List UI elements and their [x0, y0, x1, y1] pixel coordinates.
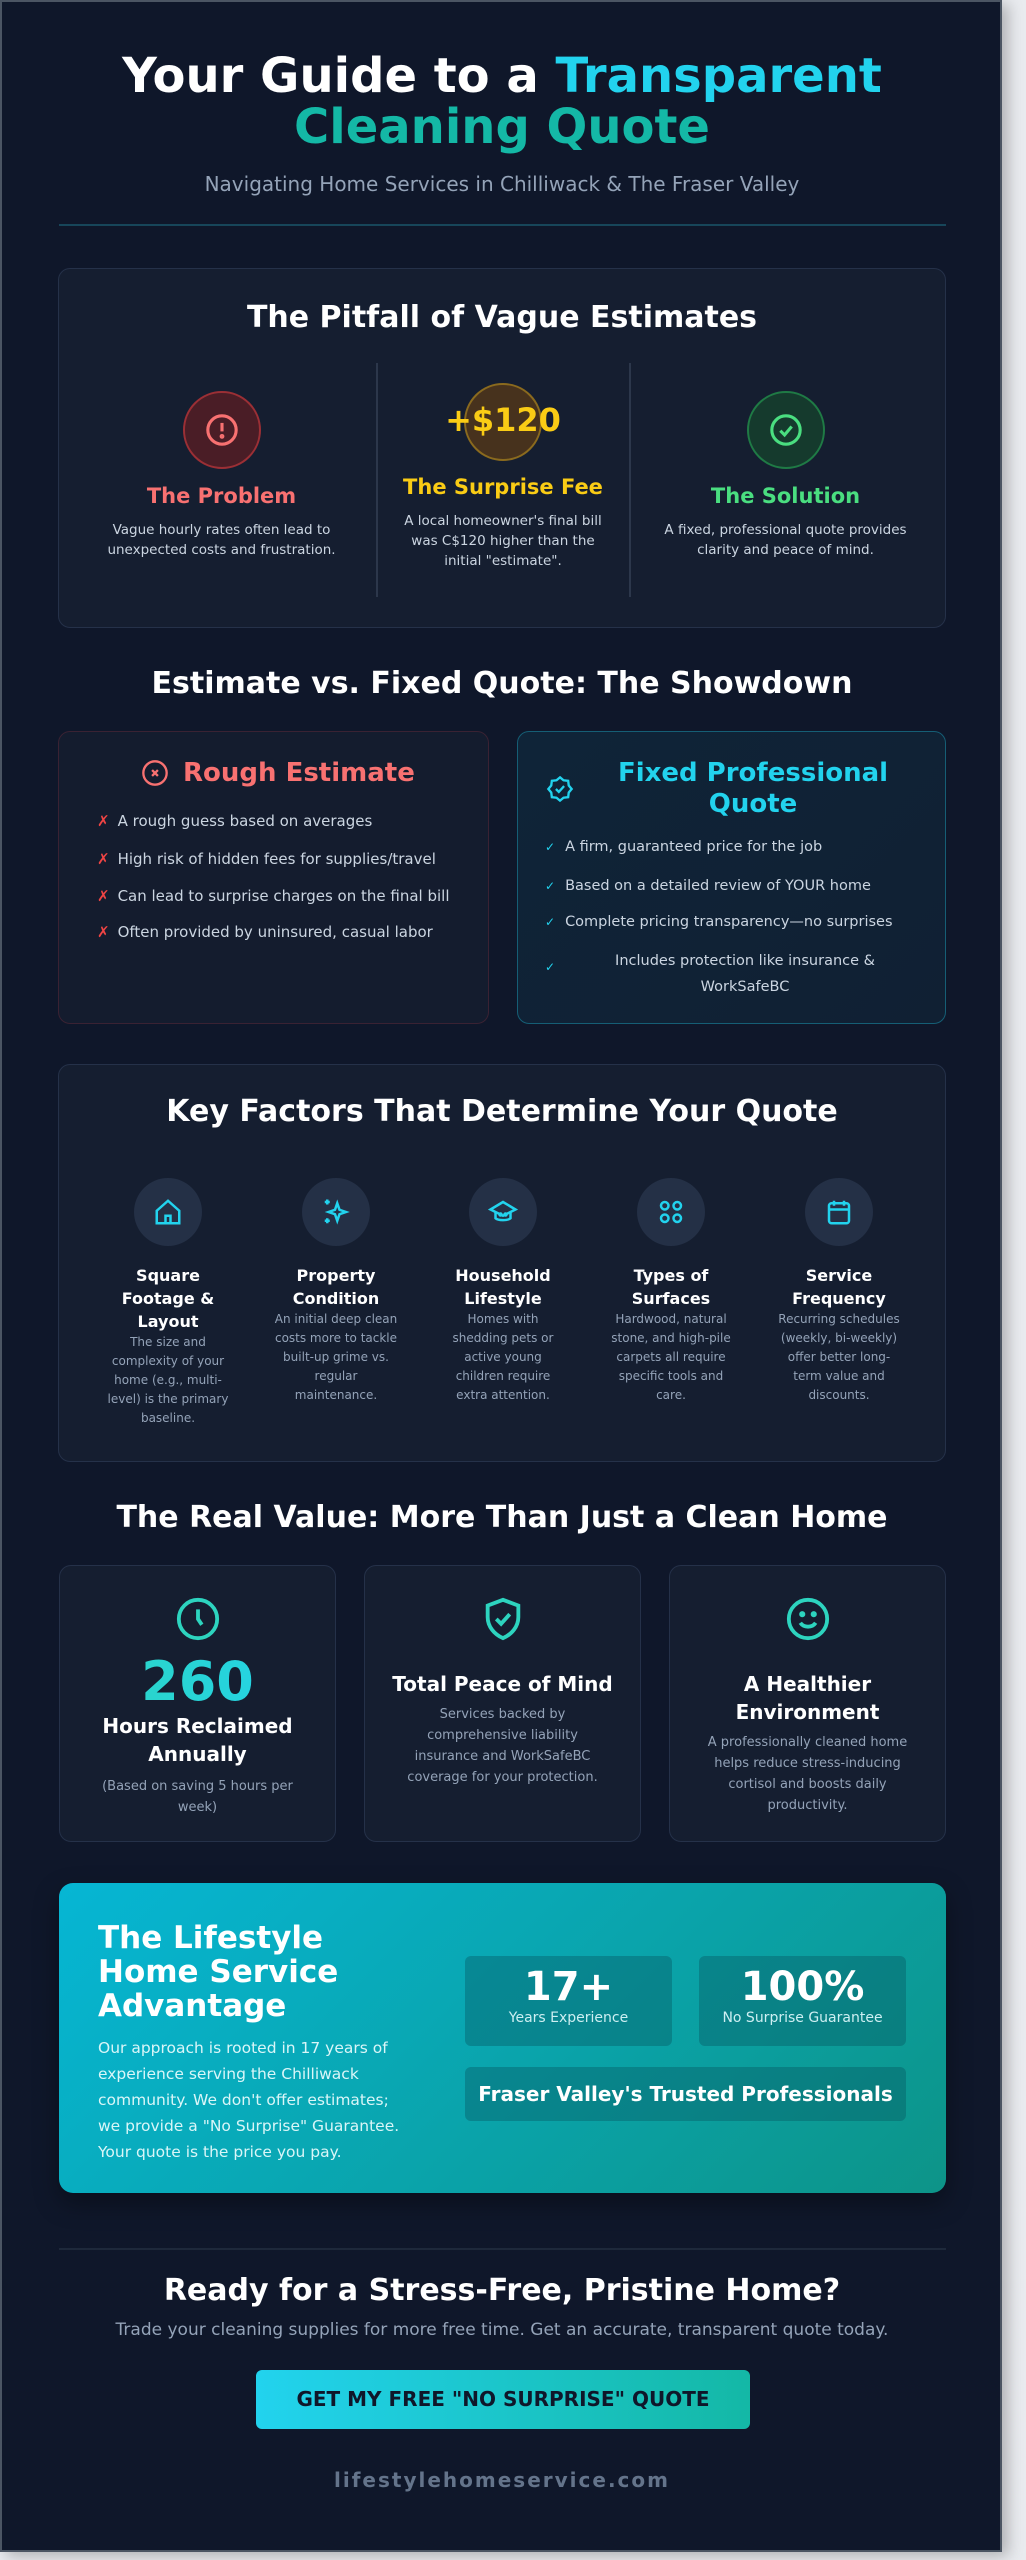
card: healthier environment: Environment	[736, 1700, 879, 1724]
factor: service frequency: offer better long-	[788, 1350, 890, 1364]
factor: square footage: baseline.	[141, 1411, 195, 1425]
icon: grid	[637, 1178, 705, 1246]
factor: service frequency: discounts.	[808, 1388, 870, 1402]
heading: rough estimate: Rough Estimate	[183, 758, 415, 788]
card: peace of mind	[364, 1565, 641, 1842]
heading: advantage: The Lifestyle	[98, 1920, 323, 1956]
card: peace of mind: coverage for your protection.	[407, 1770, 598, 1785]
factor: square footage	[108, 1178, 228, 1425]
icon: house	[134, 1178, 202, 1246]
factor: square footage: level) is the primary	[108, 1392, 228, 1406]
stat: 17+: 17+	[524, 1964, 613, 2010]
factor: property condition: Condition	[293, 1289, 379, 1308]
panel: pitfall of vague estimates	[58, 268, 946, 628]
title: Cleaning Quote	[294, 99, 710, 155]
list: fixed quote benefits: ✓ Based on a detailed review of YOUR home	[545, 878, 871, 894]
list: rough estimate drawbacks: ✗ Can lead to surprise charges on the final bill	[97, 887, 450, 905]
column: the surprise fee	[403, 383, 603, 569]
heading: showdown: Estimate vs. Fixed Quote: The Showdown	[152, 666, 852, 701]
panel: key factors	[58, 1064, 946, 1462]
icon: clock	[176, 1598, 220, 1640]
factor: service frequency: Service	[806, 1266, 872, 1285]
factor: types of surfaces: Hardwood, natural	[615, 1312, 727, 1326]
heading: fixed professional quote: Fixed Professional	[618, 758, 888, 788]
heading: call to action: Ready for a Stress-Free, Pristine Home?	[164, 2273, 840, 2308]
icon: shield check	[546, 776, 574, 802]
icon: shield	[486, 1598, 520, 1640]
card: healthier environment: productivity.	[768, 1798, 848, 1813]
factor: household lifestyle: active young	[464, 1350, 542, 1364]
factor: square footage: Layout	[138, 1312, 198, 1331]
panel: lifestyle advantage	[59, 1883, 946, 2193]
stat: 260: 260	[141, 1650, 254, 1713]
column: the surprise fee: A local homeowner's final bill	[404, 513, 602, 529]
card: healthier environment	[669, 1565, 946, 1842]
footer: website: lifestylehomeservice.com	[334, 2468, 670, 2492]
heading: advantage: Advantage	[98, 1988, 286, 2024]
column: the problem: unexpected costs and frustration.	[107, 542, 336, 558]
title: Your Guide to a Transparent	[122, 48, 882, 104]
column: the surprise fee: was C$120 higher than the	[411, 533, 595, 549]
column: the solution: A fixed, professional quote provides	[664, 522, 907, 538]
stat: 260	[60, 1652, 335, 1712]
factor: property condition: maintenance.	[295, 1388, 377, 1402]
text: cta subtitle: Trade your cleaning supplies for more free time. Get an accurate, transparent quote today.	[116, 2320, 888, 2340]
card: hours reclaimed	[59, 1565, 336, 1842]
stat: 17+	[465, 1956, 672, 2046]
icon: warning	[182, 391, 260, 469]
factor: property condition: An initial deep clean	[275, 1312, 397, 1326]
column: the surprise fee: initial "estimate".	[444, 553, 562, 569]
factor: square footage: Square	[136, 1266, 200, 1285]
text: advantage paragraph: Our approach is rooted in 17 years of	[98, 2039, 388, 2057]
card: hours reclaimed: Annually	[148, 1742, 247, 1766]
badge: trusted professionals	[465, 2067, 906, 2121]
factor: square footage: complexity of your	[112, 1354, 224, 1368]
list: fixed quote benefits: WorkSafeBC	[701, 979, 789, 995]
column: the problem	[107, 391, 336, 558]
factor: service frequency: term value and	[793, 1369, 885, 1383]
text: advantage paragraph: Your quote is the price you pay.	[98, 2143, 342, 2161]
card: hours reclaimed: Hours Reclaimed	[102, 1714, 293, 1738]
button: get quote: GET MY FREE "NO SURPRISE" QUOTE	[296, 2387, 710, 2411]
factor: types of surfaces: Surfaces	[632, 1289, 710, 1308]
heading: fixed professional quote: Quote	[709, 789, 797, 819]
list: rough estimate drawbacks	[97, 812, 450, 941]
card: peace of mind: insurance and WorkSafeBC	[415, 1749, 590, 1764]
text: advantage paragraph: experience serving the Chilliwack	[98, 2065, 359, 2083]
factor: types of surfaces: specific tools and	[619, 1369, 723, 1383]
list: fixed quote benefits: ✓ Complete pricing transparency—no surprises	[545, 914, 893, 930]
icon: sparkles	[302, 1178, 370, 1246]
factor: household lifestyle: children require	[456, 1369, 550, 1383]
text: advantage paragraph: we provide a "No Surprise" Guarantee.	[98, 2117, 399, 2135]
column: the solution: clarity and peace of mind.	[697, 542, 874, 558]
panel: rough estimate	[58, 731, 489, 1024]
factor: types of surfaces: carpets all require	[616, 1350, 726, 1364]
stat: 17+: Years Experience	[509, 2010, 628, 2026]
heading: advantage	[98, 1920, 338, 2024]
list: rough estimate drawbacks: ✗ A rough guess based on averages	[97, 812, 372, 830]
factor: service frequency: (weekly, bi-weekly)	[781, 1331, 897, 1345]
icon: pet/home	[469, 1178, 537, 1246]
icon: smile	[786, 1598, 830, 1640]
column: the problem: Vague hourly rates often lead to	[113, 522, 330, 538]
factor: service frequency: Frequency	[792, 1289, 886, 1308]
heading: real value: The Real Value: More Than Just a Clean Home	[116, 1500, 888, 1535]
card: peace of mind: Total Peace of Mind	[392, 1672, 613, 1696]
heading: pitfall: The Pitfall of Vague Estimates	[247, 300, 757, 335]
factor: square footage: home (e.g., multi-	[114, 1373, 222, 1387]
list: fixed quote benefits: ✓	[545, 960, 555, 974]
factor: types of surfaces	[611, 1178, 731, 1402]
subtitle: Navigating Home Services in Chilliwack & The Fraser Valley	[205, 172, 799, 196]
card: healthier environment: A Healthier	[744, 1672, 871, 1696]
factor: household lifestyle	[453, 1178, 554, 1402]
card: healthier environment: A professionally cleaned home	[708, 1735, 907, 1750]
card: hours reclaimed: week)	[178, 1800, 217, 1815]
factor: types of surfaces: Types of	[634, 1266, 708, 1285]
factor: property condition: costs more to tackle	[275, 1331, 397, 1345]
factor: property condition: Property	[297, 1266, 375, 1285]
badge: trusted professionals: Fraser Valley's Trusted Professionals	[478, 2082, 893, 2106]
column: the problem: The Problem	[147, 484, 296, 508]
heading: fixed professional quote	[618, 758, 888, 819]
list: fixed quote benefits	[545, 839, 893, 995]
list: fixed quote benefits: Includes protection like insurance &	[615, 953, 875, 969]
factor: service frequency: Recurring schedules	[778, 1312, 900, 1326]
list: rough estimate drawbacks: ✗ Often provided by uninsured, casual labor	[97, 923, 433, 941]
list: fixed quote benefits: ✓ A firm, guaranteed price for the job	[545, 839, 822, 855]
factor: household lifestyle: extra attention.	[456, 1388, 550, 1402]
card: healthier environment: helps reduce stress-inducing	[714, 1756, 901, 1771]
icon: calendar	[805, 1178, 873, 1246]
column: the solution: The Solution	[711, 484, 860, 508]
factor: property condition: regular	[315, 1369, 357, 1383]
factor: service frequency	[778, 1178, 900, 1402]
factor: property condition: built-up grime vs.	[283, 1350, 389, 1364]
card: peace of mind: comprehensive liability	[427, 1728, 578, 1743]
card: healthier environment: cortisol and boosts daily	[728, 1777, 887, 1792]
heading: key factors: Key Factors That Determine Your Quote	[166, 1094, 838, 1129]
stat: 100%	[699, 1956, 906, 2046]
column: the surprise fee: The Surprise Fee	[403, 475, 603, 499]
factor: square footage: Footage &	[122, 1289, 214, 1308]
factor: types of surfaces: stone, and high-pile	[611, 1331, 731, 1345]
column: the solution	[664, 391, 907, 558]
icon: check	[746, 391, 824, 469]
icon: +$120: +$120	[445, 401, 561, 439]
button: get quote	[256, 2370, 750, 2429]
list: rough estimate drawbacks: ✗ High risk of hidden fees for supplies/travel	[97, 850, 436, 868]
panel: fixed professional quote	[517, 731, 946, 1024]
factor: household lifestyle: Homes with	[468, 1312, 538, 1326]
title	[122, 48, 882, 155]
heading: advantage: Home Service	[98, 1954, 338, 1990]
factor: household lifestyle: shedding pets or	[453, 1331, 553, 1345]
text: advantage paragraph	[98, 2039, 399, 2161]
icon: +$120	[445, 383, 561, 461]
factor: types of surfaces: care.	[656, 1388, 686, 1402]
text: advantage paragraph: community. We don't offer estimates;	[98, 2091, 389, 2109]
stat: 100%: No Surprise Guarantee	[722, 2010, 883, 2026]
card: hours reclaimed: (Based on saving 5 hours per	[102, 1779, 293, 1794]
stat: 100%: 100%	[741, 1964, 864, 2010]
factor: property condition	[274, 1178, 397, 1402]
factor: household lifestyle: Lifestyle	[464, 1289, 542, 1308]
factor: household lifestyle: Household	[455, 1266, 551, 1285]
factor: square footage: The size and	[130, 1335, 206, 1349]
card: peace of mind: Services backed by	[440, 1707, 565, 1722]
